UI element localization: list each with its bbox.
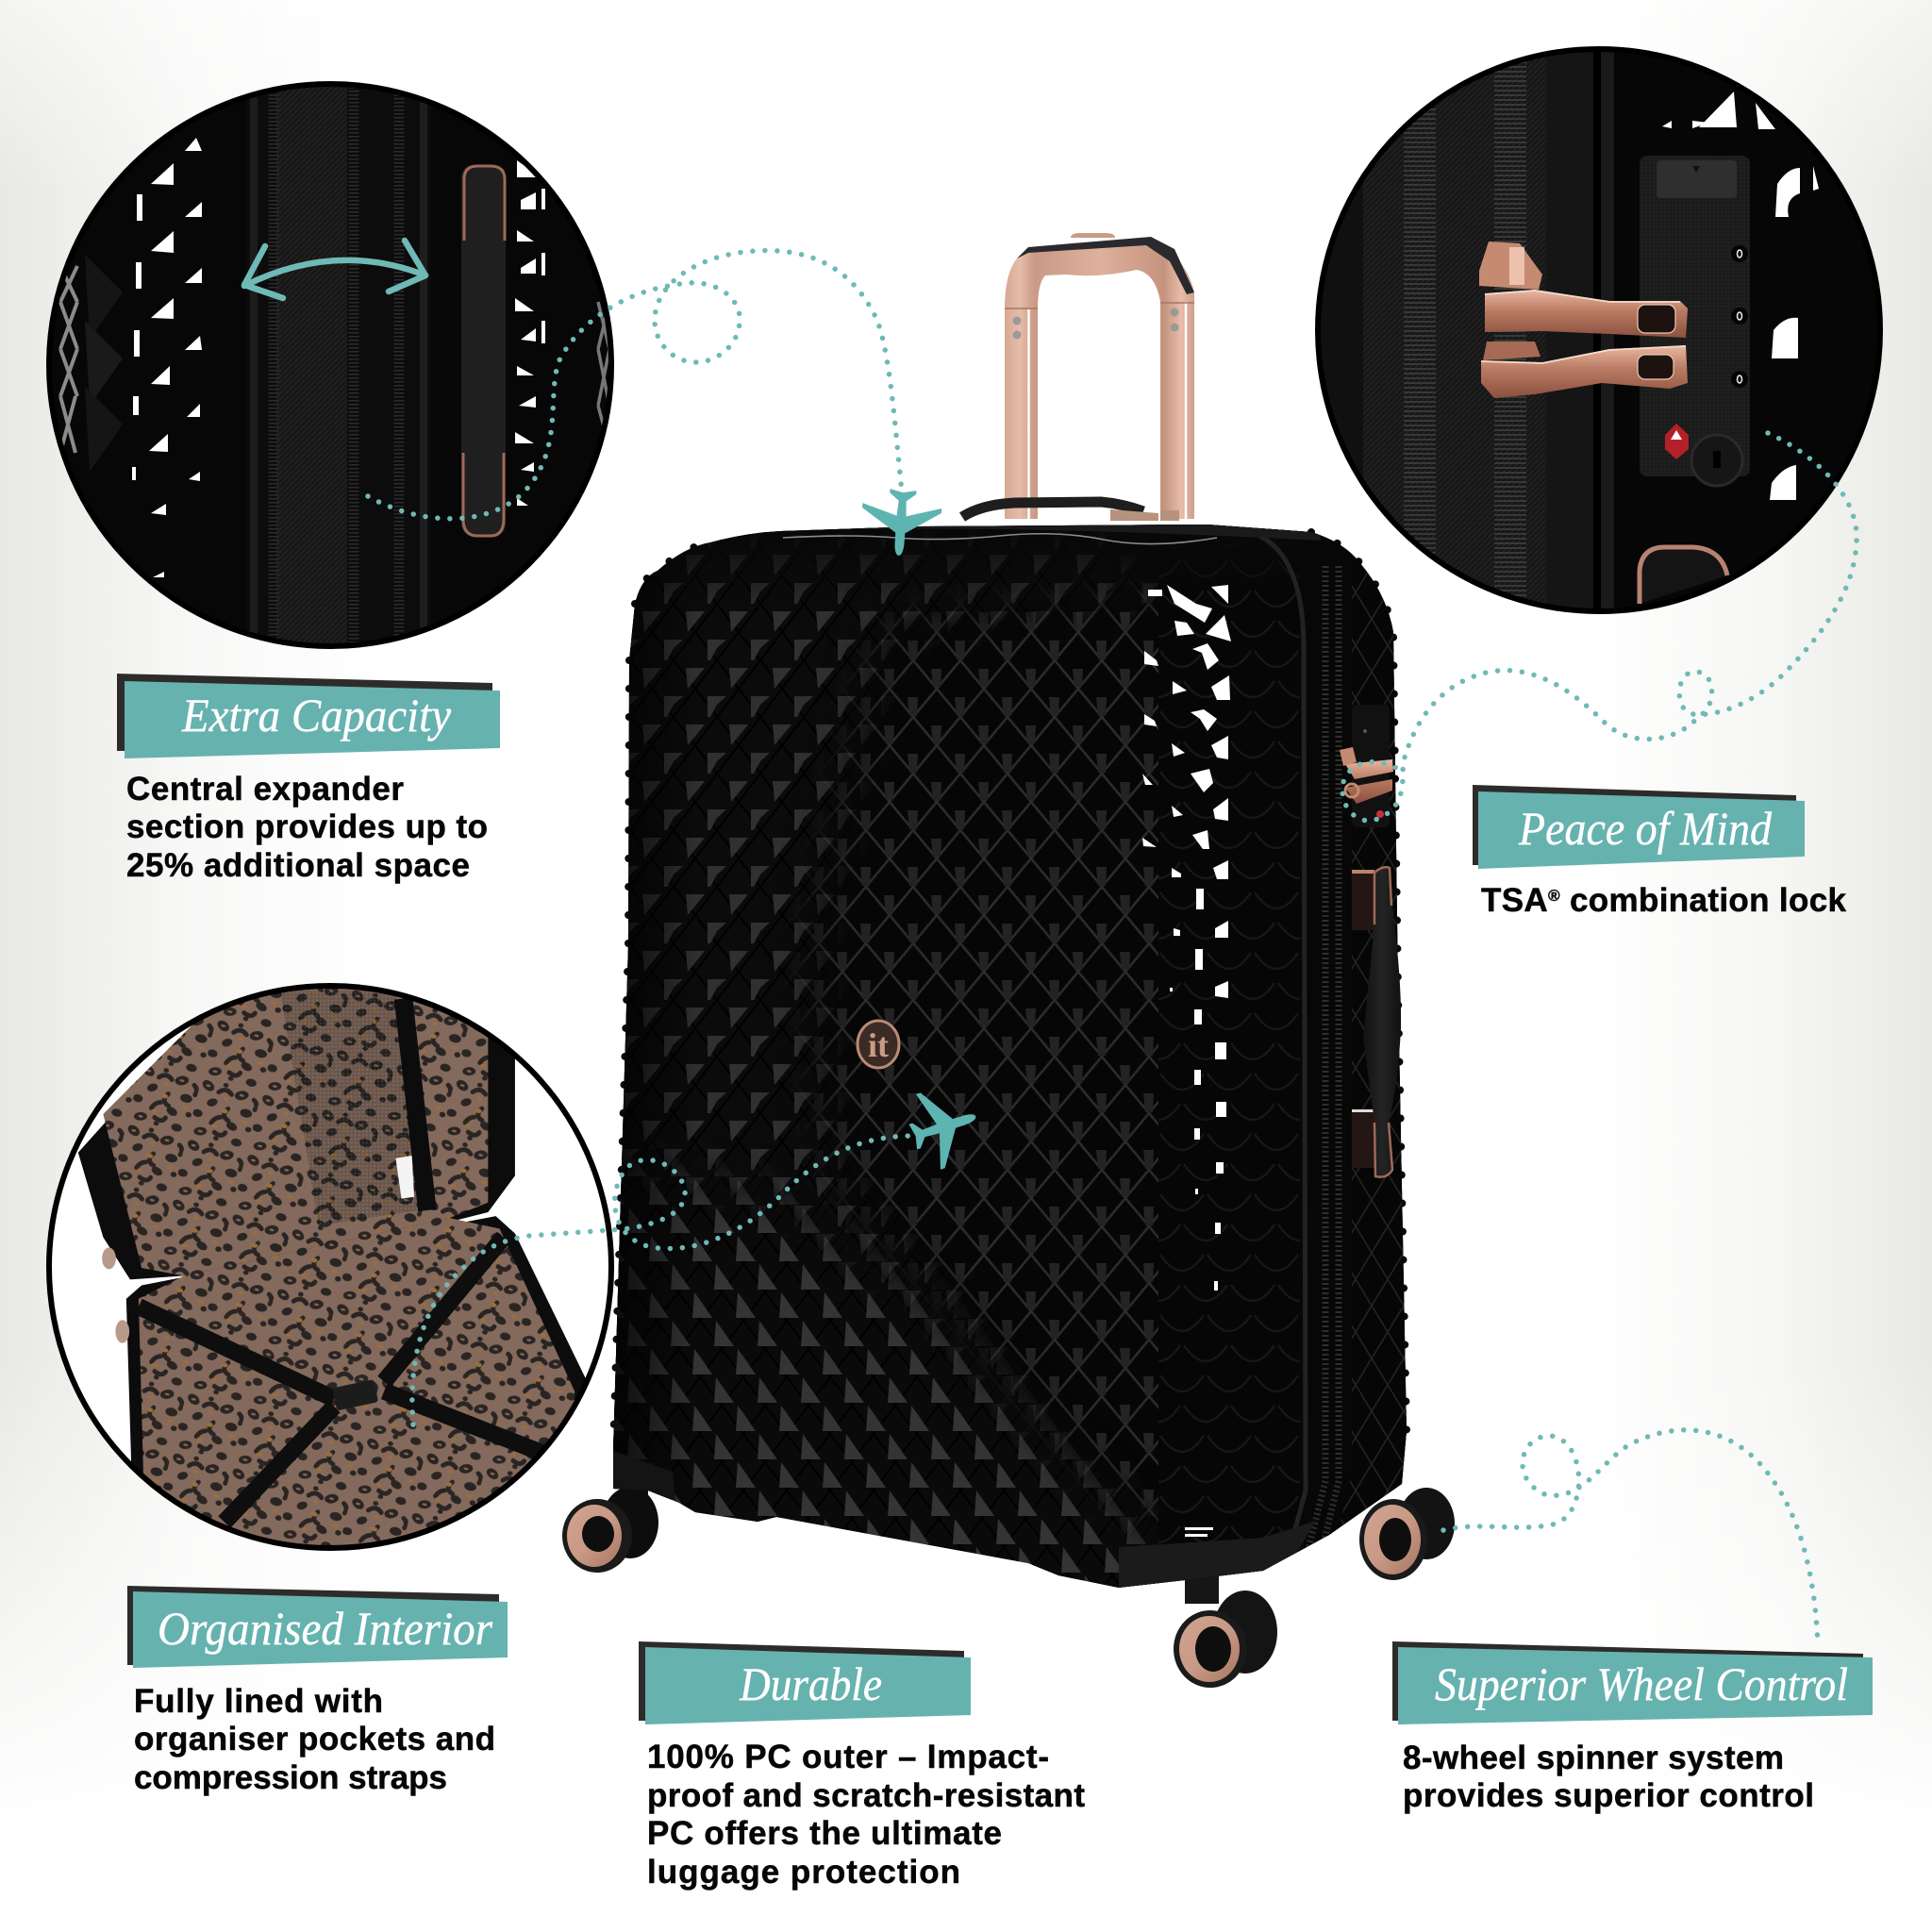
text: Extra Capacity description: Central expander <box>126 771 404 808</box>
text: Durable description: 100% PC outer – Impact- <box>647 1739 1049 1775</box>
heading: Peace of Mind <box>1473 785 1805 869</box>
brand logo <box>856 1019 901 1070</box>
dotted flight path: organised interior <box>412 1136 911 1424</box>
text: Peace of Mind description: ® <box>1548 887 1560 905</box>
text: Superior Wheel Control description <box>1403 1740 1814 1814</box>
side handle <box>461 165 506 536</box>
panel: interior close-up <box>49 983 611 1553</box>
text: Organised Interior description: Fully lined with <box>134 1683 383 1720</box>
icon: plane on front of case <box>901 1079 988 1174</box>
heading: Peace of Mind: Peace of Mind <box>1518 802 1773 855</box>
text: Durable description: proof and scratch-resistant <box>647 1777 1085 1814</box>
text: Peace of Mind description: combination lock <box>1560 882 1847 919</box>
body shell <box>591 519 1415 1604</box>
compression straps <box>139 1238 541 1522</box>
side lock and zip pulls <box>1340 705 1393 827</box>
heading: Durable: Durable <box>739 1657 882 1710</box>
icon: plane at top of case <box>859 487 942 558</box>
dotted flight path: extra capacity <box>368 251 903 519</box>
zipper fabric <box>1317 47 1614 613</box>
side handle end <box>1640 547 1727 604</box>
text: Organised Interior description: compression straps <box>134 1759 447 1796</box>
brand logo: it <box>868 1026 889 1064</box>
heading: Durable <box>639 1641 971 1724</box>
text: Durable description <box>647 1739 1085 1890</box>
white reflections <box>1662 92 1819 500</box>
rear shell and zip band <box>1326 546 1407 1536</box>
text: Organised Interior description: organiser pockets and <box>134 1721 495 1757</box>
text: Durable description: luggage protection <box>647 1854 960 1890</box>
wheel: right rear <box>1359 1488 1455 1580</box>
heading: Organised Interior: Organised Interior <box>158 1602 493 1655</box>
white reflections <box>132 138 545 577</box>
text: Peace of Mind description: TSA <box>1481 882 1548 919</box>
text: Superior Wheel Control description: 8-wheel spinner system <box>1403 1740 1784 1776</box>
side handle <box>1352 867 1401 1177</box>
expander fabric <box>247 75 431 660</box>
dotted flight path: peace of mind <box>1342 433 1857 821</box>
suitcase <box>562 233 1455 1688</box>
rose gold zip pulls <box>1479 242 1688 398</box>
text: Extra Capacity description: section provides up to <box>126 808 488 845</box>
wheel: right front <box>1174 1575 1277 1688</box>
telescopic trolley handle <box>1005 233 1194 519</box>
strap buckle <box>332 1379 378 1410</box>
heading: Extra Capacity <box>117 674 500 758</box>
text: Extra Capacity description: 25% additional space <box>126 847 470 884</box>
heading: Superior Wheel Control: Superior Wheel Control <box>1435 1657 1848 1710</box>
heading: Organised Interior <box>127 1586 508 1668</box>
dotted flight path: wheel control <box>1443 1430 1818 1646</box>
panel: expander close-up <box>49 75 611 660</box>
text: Organised Interior description <box>134 1683 495 1796</box>
panel: lock close-up <box>1317 47 1880 613</box>
dark side strip of the front shell <box>1158 528 1307 1604</box>
glossy highlights <box>1142 585 1231 1537</box>
text: Superior Wheel Control description: provides superior control <box>1403 1777 1814 1814</box>
heading: Superior Wheel Control <box>1392 1641 1873 1724</box>
expansion arrow <box>244 241 425 298</box>
base lining <box>126 1216 586 1553</box>
wheel: left rear <box>562 1481 658 1573</box>
carry handle <box>962 502 1179 521</box>
text: Durable description: PC offers the ultimate <box>647 1815 1002 1852</box>
text: Extra Capacity description <box>126 771 488 884</box>
lid lining <box>78 983 515 1279</box>
TSA combination lock <box>1640 156 1750 486</box>
quilted shell sides <box>60 255 609 472</box>
side wheels <box>102 1248 116 1269</box>
heading: Extra Capacity: Extra Capacity <box>181 689 452 741</box>
